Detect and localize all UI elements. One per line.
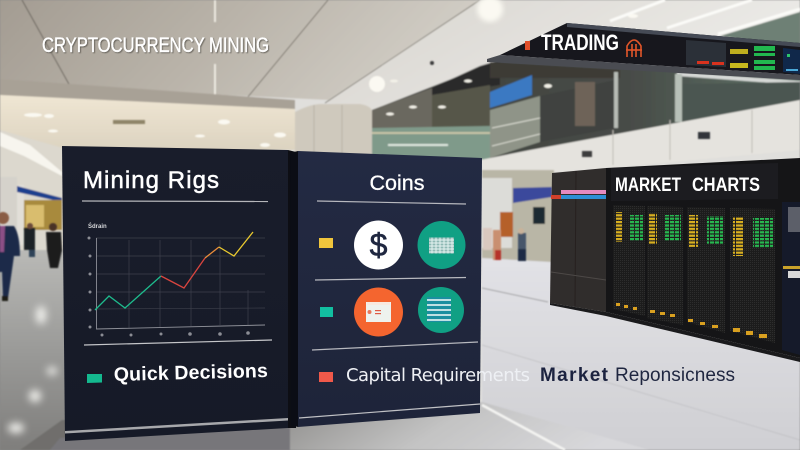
board 4 (730, 208, 775, 343)
sign: trading board (487, 23, 800, 80)
board 5 partial (782, 202, 800, 355)
label: capital requirements, market responsiveness: Market (540, 365, 609, 386)
trading label: TRADING (541, 30, 619, 55)
label: capital requirements, market responsiveness: Capital Requirements (346, 365, 530, 386)
column (295, 104, 372, 160)
panel: mining rigs (62, 146, 296, 441)
right cabinet: market charts (550, 158, 800, 362)
board 1 (613, 205, 645, 316)
legend swatch: quick decisions (87, 374, 102, 383)
left corridor (0, 130, 70, 260)
panel: coins (290, 151, 482, 427)
lower ceiling band (0, 79, 295, 110)
label: capital requirements, market responsiveness (346, 365, 735, 386)
ceiling: grey left slab (0, 0, 480, 100)
label: capital requirements, market responsiveness: Reponsicness (615, 365, 735, 386)
left floor (0, 250, 72, 450)
legend swatch: red (319, 372, 333, 382)
icon: teal table (418, 287, 464, 333)
balustrade (480, 100, 800, 177)
upper atrium glass (372, 60, 800, 160)
sign: security camera and device (430, 61, 710, 157)
heading: market charts (611, 163, 778, 201)
heading: market charts: MARKET (615, 175, 681, 196)
line chart: Śdrain (88, 223, 107, 230)
coloured strip (561, 190, 606, 194)
icon: dollar coin: $ (370, 227, 388, 263)
line chart (88, 223, 265, 336)
icon: teal keypad (418, 221, 466, 269)
icon: dollar coin (354, 220, 403, 270)
legend swatch: yellow (319, 238, 333, 248)
person: man in suit (0, 212, 20, 301)
right lower hall (482, 170, 554, 267)
legend swatch: teal (320, 307, 333, 317)
heading: mining rigs: Mining Rigs (83, 167, 219, 194)
floors (482, 258, 800, 450)
market tickers (686, 40, 726, 67)
title: CRYPTOCURRENCY MINING (42, 34, 269, 57)
under-sign dark strip (490, 62, 620, 78)
people in background (0, 212, 526, 301)
heading: coins: Coins (370, 171, 424, 195)
icon: orange card (354, 288, 403, 336)
board 2 (647, 206, 683, 325)
people on the right (483, 228, 492, 250)
label: quick decisions: Quick Decisions (114, 360, 268, 386)
trading logo (626, 40, 642, 57)
heading: market charts: CHARTS (692, 175, 760, 196)
ceiling lights (24, 0, 800, 147)
board 3 (687, 207, 725, 333)
